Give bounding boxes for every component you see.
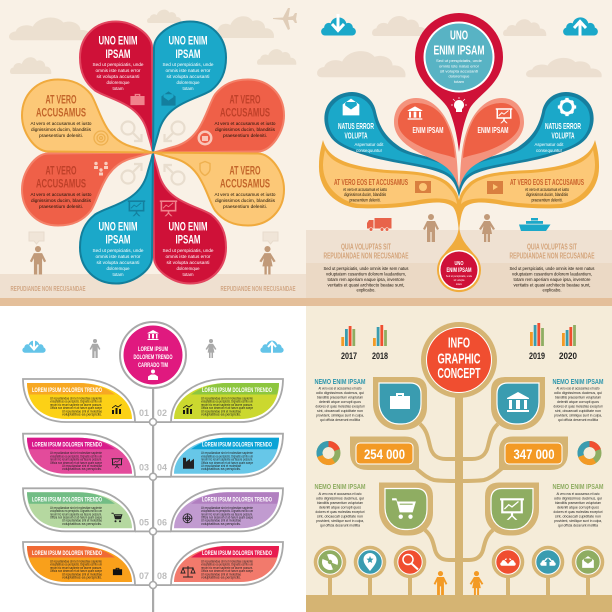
icon: location star <box>358 550 382 574</box>
text: blue top petal: sit volupta accusanti <box>166 74 210 79</box>
leaf 05: LOREM IPSUM DOLOREN TRENDO <box>32 496 102 503</box>
leaf 07: Ut repudiandae sint et molestiae <box>62 572 102 576</box>
leaf 01: voluptatibus ea perspiciis. <box>62 412 102 416</box>
leaf 05: rerum hic rerum sapiente ea facere possum. <box>50 512 102 516</box>
text: orange right petal: AT VERO <box>230 92 260 106</box>
yellow leaf text: dignissimos ducim, blanditiis <box>526 192 568 197</box>
leaf 03: Ut repudiandae sint et molestiae sapiente <box>50 451 102 455</box>
pin text: ENIM IPSAM <box>434 42 484 58</box>
pin text: omnis iste natus error <box>439 64 480 68</box>
leaf 02: Ut repudiandae sint et molestiae <box>201 409 241 413</box>
text block: lower left: sint, obcaecati cupiditate non <box>317 514 363 518</box>
blue leaves <box>324 92 594 197</box>
pin text: UNO <box>450 28 468 42</box>
leaf 06: Ut repudiandae sint et molestiae <box>201 519 241 523</box>
leaf 04: Officia non deserunt et ab harum quam saepe <box>201 461 253 465</box>
chart 2020: 2020 <box>559 351 577 362</box>
leaf 03: voluptatibus ea perspiciis. Dignatis est illo um <box>50 454 102 458</box>
text: yellow left petal: ACCUSAMUS <box>36 106 86 120</box>
yellow leaf text: dignissimos ducim, blanditiis <box>344 192 386 197</box>
petal icons <box>94 91 211 216</box>
text: red bottom petal: UNO ENIM <box>168 220 208 234</box>
leaf 01: rerum hic rerum sapiente ea facere possum. <box>50 403 102 407</box>
yellow leaf text: At vero et accusamus et iusto <box>343 187 387 192</box>
icon: disc <box>318 550 342 574</box>
leaf 07 <box>23 542 149 585</box>
pin text: Sed ut perspiciatis, unde <box>436 59 482 63</box>
leaf 05: 05 <box>139 517 149 527</box>
bottom left text block: veritatis et quasi architecto beatae sunt, <box>328 282 404 288</box>
text block: upper left: NEMO ENIM IPSAM <box>314 377 366 386</box>
text block: lower right: deleniti atque corrupti quos <box>557 506 599 510</box>
text block: lower left: odio dignissimos ducimus, qui <box>316 496 364 500</box>
blue leaf text: Aspernatur odit <box>534 142 564 147</box>
text block: upper left: sint, obcaecati cupiditate non <box>317 409 363 413</box>
leaf 05: voluptatibus ea perspiciis. <box>62 522 102 526</box>
pin text: sit volupta accusanti <box>440 70 478 74</box>
text: red top petal <box>92 34 144 91</box>
top circle <box>120 322 186 388</box>
chart 2019 <box>529 323 545 362</box>
leaf 05: Ut repudiandae sint et molestiae sapiente <box>50 506 102 510</box>
text block: lower left: NEMO ENIM IPSAM <box>314 482 366 491</box>
panel: info graphic concept tree <box>306 306 612 612</box>
donut chart right <box>580 444 598 462</box>
leaf 04 <box>157 434 283 477</box>
leaf 07: Officia non deserunt et ab harum quam saepe <box>50 569 102 573</box>
leaf 05: voluptatibus ea perspiciis. Dignatis est illo um <box>50 509 102 513</box>
top circle: DOLOREM TRENDO <box>134 354 172 361</box>
chart 2018: 2018 <box>372 351 388 362</box>
donut chart left <box>319 444 338 462</box>
icon: ship <box>519 218 550 231</box>
text block: upper left: provident, similique sunt in culpa, <box>316 414 364 418</box>
panel: leaf stem list infographic <box>0 306 306 612</box>
blue leaf text: ENIM IPSAM <box>412 125 444 135</box>
leaf 06: Officia non deserunt et ab harum quam saepe <box>201 516 253 520</box>
leaf 01: Officia non deserunt et ab harum quam saepe <box>50 406 102 410</box>
chart 2017: 2017 <box>341 351 357 362</box>
text: orange left petal: praesentium deleniti. <box>39 204 83 209</box>
leaf 02: voluptatibus ea perspiciis. <box>201 412 241 416</box>
text: orange right petal: dignissimos ducim, blanditiis <box>215 127 276 132</box>
text: yellow left petal: dignissimos ducim, blanditiis <box>31 127 92 132</box>
icon: download cloud <box>496 550 520 574</box>
text: orange right petal: ACCUSAMUS <box>220 106 270 120</box>
text: blue top petal <box>162 34 214 91</box>
bottom left text block: Sed ut perspiciatis, unde omnis iste sem natus <box>324 266 409 271</box>
text: blue bottom petal: totam <box>112 272 124 277</box>
leaf 02 <box>157 379 283 422</box>
petals <box>22 22 284 284</box>
bar charts and years <box>341 323 577 362</box>
text: blue bottom petal: IPSAM <box>106 232 130 246</box>
text: blue bottom petal: omnis iste natus error <box>96 254 141 259</box>
yellow leaf text: AT VERO EOS ET ACCUSAMUS <box>334 177 408 187</box>
text: blue top petal: IPSAM <box>176 47 200 61</box>
text: yellow right petal: praesentium deleniti. <box>223 204 267 209</box>
text: yellow right petal: AT VERO <box>230 164 260 178</box>
text: blue top petal: UNO ENIM <box>168 34 208 48</box>
text block: upper right: provident, similique sunt in culpa, <box>554 414 602 418</box>
row 05 06 <box>23 488 283 535</box>
leaf 01: voluptatibus ea perspiciis. Dignatis est illo um <box>50 400 102 404</box>
leaf 06 <box>157 488 283 531</box>
blue leaf text: consequuntur <box>536 148 562 153</box>
text block: lower right: blanditiis praesentium voluptatum <box>555 501 601 505</box>
panel: pin and leaves infographic <box>306 0 612 306</box>
drop with circle: UNO <box>454 261 464 267</box>
people <box>434 571 483 595</box>
text block: upper right: odio dignissimos ducimus, qui <box>554 391 602 395</box>
bottom left text block <box>324 242 409 292</box>
salmon petals <box>394 98 524 190</box>
gender symbols <box>122 122 184 184</box>
icon tile: bank <box>491 377 545 430</box>
icon: upload cloud <box>260 341 284 353</box>
bottom left text block: QUIA VOLUPTAS SIT <box>341 242 391 252</box>
leaf 01: LOREM IPSUM DOLOREN TRENDO <box>32 387 102 394</box>
leaf 06: Ut repudiandae sint et molestiae sapiente <box>201 506 253 510</box>
icon tile: cart <box>379 482 433 536</box>
chart 2019: 2019 <box>529 351 545 362</box>
leaf 07: LOREM IPSUM DOLOREN TRENDO <box>32 550 102 557</box>
leaf 03: 03 <box>139 463 149 473</box>
text: blue top petal: omnis iste natus error <box>166 68 211 73</box>
drop with circle: Sed ut perspiciatis, unde <box>446 275 473 278</box>
icon: download cloud <box>22 339 46 353</box>
blue leaf text: NATUS ERROR <box>338 121 374 131</box>
leaf 03: Ut repudiandae sint et molestiae <box>62 464 102 468</box>
leaf 06: LOREM IPSUM DOLOREN TRENDO <box>202 496 272 503</box>
leaf 04: Ut repudiandae sint et molestiae sapiente <box>201 451 253 455</box>
leaf 08: voluptatibus ea perspiciis. <box>201 576 241 580</box>
leaf 02: Officia non deserunt et ab harum quam saepe <box>201 406 253 410</box>
leaf 02: 02 <box>157 408 167 418</box>
yellow leaf text: At vero et accusamus et iusto <box>525 187 569 192</box>
text block: lower right: At vero eos et accusamus et iusto <box>556 492 600 496</box>
text block: lower left: At vero eos et accusamus et iusto <box>318 492 362 496</box>
text: blue bottom petal: UNO ENIM <box>98 220 138 234</box>
value box: 254 000: 254 000 <box>364 446 405 462</box>
text: orange right petal: praesentium deleniti. <box>223 133 267 138</box>
leaf 07: voluptatibus ea perspiciis. <box>62 576 102 580</box>
bottom left text block: totam rem aperiam eaque ipsa, inventore <box>328 277 405 282</box>
text: blue bottom petal: Sed ut perspiciatis, unde <box>92 248 144 253</box>
yellow leaves <box>319 140 599 233</box>
text: red top petal: IPSAM <box>106 47 130 61</box>
chart 2020 <box>559 325 577 362</box>
text block: upper right: At vero eos et accusamus et iusto <box>556 386 600 390</box>
bottom right text block: voluptatem cusantium dolorem laudantium, <box>512 272 592 276</box>
text block: upper right <box>552 377 604 422</box>
value box: 254 000 <box>350 436 419 470</box>
bottom left text block: REPUDIANDAE NON RECUSANDAE <box>324 252 409 260</box>
bottom right text block: explicabo. <box>542 288 562 292</box>
bottom left text block: explicabo. <box>356 288 376 292</box>
icon: airplane <box>273 8 297 30</box>
text: red bottom petal <box>162 220 214 277</box>
leaf 01: 01 <box>139 408 149 418</box>
leaf 04: voluptatibus ea perspiciis. Dignatis est illo um <box>201 454 253 458</box>
leaf 06: 06 <box>157 517 167 527</box>
text block: lower left <box>314 482 366 528</box>
text block: lower left: provident, similique sunt in culpa, <box>316 519 364 523</box>
leaf 03: rerum hic rerum sapiente ea facere possum. <box>50 458 102 462</box>
icon: truck <box>367 218 392 231</box>
text block: upper left: qui officia deserunt mollitia <box>320 418 360 422</box>
trunk and branches <box>413 424 505 560</box>
pin text <box>434 28 484 84</box>
row 07 08 <box>23 542 283 588</box>
leaf 08: Officia non deserunt et ab harum quam saepe <box>201 569 253 573</box>
leaf 04: voluptatibus ea perspiciis. <box>201 467 241 471</box>
bottom left text block: voluptatem cusantium dolorem laudantium, <box>326 272 406 276</box>
leaf 04: 04 <box>157 463 167 473</box>
leaf 07: 07 <box>139 571 149 581</box>
text: red bottom petal: IPSAM <box>176 232 200 246</box>
drop with circle <box>437 225 481 292</box>
leaf 02: Ut repudiandae sint et molestiae sapiente <box>201 396 253 400</box>
text: blue top petal: doloremque <box>176 80 200 85</box>
text block: lower right: sint, obcaecati cupiditate non <box>555 514 601 518</box>
text: red bottom petal: Sed ut perspiciatis, unde <box>162 248 214 253</box>
chart 2018 <box>372 325 388 362</box>
text block: upper left <box>314 377 366 422</box>
text block: lower right: odio dignissimos ducimus, qui <box>554 496 602 500</box>
icon: upload cloud <box>563 17 598 36</box>
text: red bottom petal: sit volupta accusanti <box>166 260 210 265</box>
text: blue top petal: totam <box>182 86 194 91</box>
leaf 06: voluptatibus ea perspiciis. Dignatis est illo um <box>201 509 253 513</box>
text block: lower left: blanditiis praesentium voluptatum <box>317 501 363 505</box>
leaf 07: rerum hic rerum sapiente ea facere possum. <box>50 566 102 570</box>
text block: lower right <box>552 482 604 528</box>
footer labels: REPUDIANDE NON RECUSANDAE <box>10 286 86 293</box>
leaf 05 <box>23 488 149 531</box>
row 03 04 <box>23 434 283 480</box>
people <box>90 339 216 358</box>
background clouds <box>9 10 296 74</box>
text block: lower right: dolores et quas molestias excepturi <box>554 510 603 514</box>
text: red bottom petal: totam <box>182 272 194 277</box>
top circle: info graphic concept: CONCEPT <box>438 365 480 382</box>
leaf 05: Officia non deserunt et ab harum quam saepe <box>50 516 102 520</box>
leaf 06: voluptatibus ea perspiciis. <box>201 522 241 526</box>
value box: 347 000 <box>499 436 568 470</box>
leaf 08: LOREM IPSUM DOLOREN TRENDO <box>202 550 272 557</box>
text: red top petal: omnis iste natus error <box>96 68 141 73</box>
top circle: info graphic concept <box>421 322 497 398</box>
leaf 03: LOREM IPSUM DOLOREN TRENDO <box>32 442 102 449</box>
text block: upper left: blanditiis praesentium voluptatum <box>317 396 363 400</box>
blue leaf text <box>338 121 581 153</box>
chart 2017 <box>341 326 357 362</box>
icon: envelope <box>576 550 600 574</box>
top circle: info graphic concept: GRAPHIC <box>438 350 481 368</box>
drop with circle: sit volupta <box>454 279 465 282</box>
stem <box>152 386 154 612</box>
text: red top petal: sit volupta accusanti <box>96 74 140 79</box>
icon tile: presentation board <box>485 482 539 536</box>
leaf 05: Ut repudiandae sint et molestiae <box>62 519 102 523</box>
bottom right text block: veritatis et quasi architecto beatae sunt, <box>514 282 590 288</box>
text: yellow right petal: ACCUSAMUS <box>220 176 270 190</box>
text block: upper right: deleniti atque corrupti quos <box>557 400 599 404</box>
text block: upper right: dolores et quas molestias excepturi <box>554 404 603 408</box>
text block: upper right: qui officia deserunt mollitia <box>558 418 598 422</box>
text block: lower left: qui officia deserunt mollitia <box>320 524 360 528</box>
leaf 01: Ut repudiandae sint et molestiae sapiente <box>50 396 102 400</box>
drop with circle: ENIM IPSAM <box>446 268 472 274</box>
people with speech bubbles <box>29 232 278 274</box>
text block: upper left: dolores et quas molestias excepturi <box>316 404 365 408</box>
leaf 08: Ut repudiandae sint et molestiae sapiente <box>201 560 253 564</box>
leaf 03 <box>23 434 149 477</box>
text block: lower left: dolores et quas molestias excepturi <box>316 510 365 514</box>
background clouds <box>317 16 602 77</box>
text block: lower right: qui officia deserunt mollitia <box>558 524 598 528</box>
leaf 08: Ut repudiandae sint et molestiae <box>201 572 241 576</box>
text: yellow left petal <box>30 92 92 138</box>
leaf 04: LOREM IPSUM DOLOREN TRENDO <box>202 442 272 449</box>
yellow leaf text: praesentium deleniti. <box>350 198 380 202</box>
leaf 04: rerum hic rerum sapiente ea facere possum. <box>201 458 253 462</box>
text: blue bottom petal <box>92 220 144 277</box>
text: red top petal: totam <box>112 86 124 91</box>
ground <box>306 595 612 612</box>
leaf 08: 08 <box>157 571 167 581</box>
text: yellow right petal: dignissimos ducim, blanditiis <box>215 198 276 203</box>
top circle: LOREM IPSUM <box>138 346 168 353</box>
leaf 03: Officia non deserunt et ab harum quam saepe <box>50 461 102 465</box>
leaf 01 <box>23 379 149 422</box>
text: orange left petal: dignissimos ducim, blanditiis <box>31 198 92 203</box>
yellow leaf text: praesentium deleniti. <box>532 198 562 202</box>
leaf 02: LOREM IPSUM DOLOREN TRENDO <box>202 387 272 394</box>
icons on leaves <box>343 98 576 194</box>
text: red top petal: Sed ut perspiciatis, unde <box>92 62 144 67</box>
row 01 02 <box>23 379 283 426</box>
pin text: totam <box>454 80 464 84</box>
top circle: CARRADO TIM <box>138 362 168 369</box>
bottom right text block: Sed ut perspiciatis, unde omnis iste sem natus <box>510 266 595 271</box>
icon tile: briefcase <box>373 377 427 430</box>
blue leaf text: VOLUPTA <box>344 130 368 140</box>
text: yellow right petal <box>214 164 276 209</box>
leaf 08 <box>157 542 283 585</box>
blue leaf text: NATUS ERROR <box>545 121 581 131</box>
text: red top petal: doloremque <box>106 80 130 85</box>
top circle: info graphic concept: INFO <box>448 334 470 352</box>
panel: petal flower infographic <box>0 0 306 306</box>
text: yellow right petal: At vero et accusamus et iusto <box>214 192 276 197</box>
text block: lower right: provident, similique sunt in culpa, <box>554 519 602 523</box>
leaf 08: rerum hic rerum sapiente ea facere possum. <box>201 566 253 570</box>
leaf 04: Ut repudiandae sint et molestiae <box>201 464 241 468</box>
text: orange left petal: At vero et accusamus et iusto <box>30 192 92 197</box>
text: red top petal: UNO ENIM <box>98 34 138 48</box>
bottom circle icons <box>314 546 604 596</box>
leaf 07: Ut repudiandae sint et molestiae sapiente <box>50 560 102 564</box>
blue leaf text: VOLUPTA <box>552 130 574 140</box>
yellow leaf text <box>334 177 584 202</box>
text: red bottom petal: omnis iste natus error <box>166 254 211 259</box>
bottom right text block: totam rem aperiam eaque ipsa, inventore <box>514 277 591 282</box>
blue leaf text: Aspernatur odit <box>354 142 384 147</box>
text block: upper left: At vero eos et accusamus et iusto <box>318 386 362 390</box>
icon: upload cloud <box>536 550 560 574</box>
footer labels: REPUDIANDE NON RECUSANDAE <box>220 286 296 293</box>
text: red bottom petal: doloremque <box>176 266 200 271</box>
text block: upper right: blanditiis praesentium voluptatum <box>555 396 601 400</box>
bottom right text block: QUIA VOLUPTAS SIT <box>527 242 577 252</box>
pin text: doloremque <box>448 74 470 78</box>
text block: upper right: sint, obcaecati cupiditate non <box>555 409 601 413</box>
icon: light bulb <box>451 97 467 112</box>
icon: magnifier <box>398 550 422 574</box>
footer labels <box>10 286 296 293</box>
text: orange right petal <box>214 92 276 138</box>
leaf 06: rerum hic rerum sapiente ea facere possum. <box>201 512 253 516</box>
leaf 02: rerum hic rerum sapiente ea facere possum. <box>201 403 253 407</box>
text: blue bottom petal: sit volupta accusanti <box>96 260 140 265</box>
leaf 02: voluptatibus ea perspiciis. Dignatis est illo um <box>201 400 253 404</box>
leaf 07: voluptatibus ea perspiciis. Dignatis est illo um <box>50 563 102 567</box>
drop with circle: totam <box>456 283 462 286</box>
icon: download cloud <box>321 14 356 36</box>
text: orange right petal: At vero et accusamus et iusto <box>214 121 276 126</box>
text: yellow left petal: praesentium deleniti. <box>39 133 83 138</box>
blue leaf text: consequuntur <box>356 148 382 153</box>
text: yellow left petal: At vero et accusamus et iusto <box>30 121 92 126</box>
text: orange left petal <box>30 164 92 209</box>
text block: lower left: deleniti atque corrupti quos <box>319 506 361 510</box>
text block: upper left: deleniti atque corrupti quos <box>319 400 361 404</box>
text: orange left petal: ACCUSAMUS <box>36 176 86 190</box>
red pin <box>415 13 503 152</box>
text: yellow left petal: AT VERO <box>46 92 76 106</box>
people <box>423 214 495 242</box>
text: blue bottom petal: doloremque <box>106 266 130 271</box>
text: orange left petal: AT VERO <box>46 164 76 178</box>
text: blue top petal: Sed ut perspiciatis, unde <box>162 62 214 67</box>
leaf 08: voluptatibus ea perspiciis. Dignatis est illo um <box>201 563 253 567</box>
bottom right text block <box>510 242 595 292</box>
text block: upper left: odio dignissimos ducimus, qui <box>316 391 364 395</box>
leaf 03: voluptatibus ea perspiciis. <box>62 467 102 471</box>
value box: 347 000: 347 000 <box>514 446 555 462</box>
leaf 01: Ut repudiandae sint et molestiae <box>62 409 102 413</box>
blue leaf text: ENIM IPSAM <box>478 125 508 135</box>
